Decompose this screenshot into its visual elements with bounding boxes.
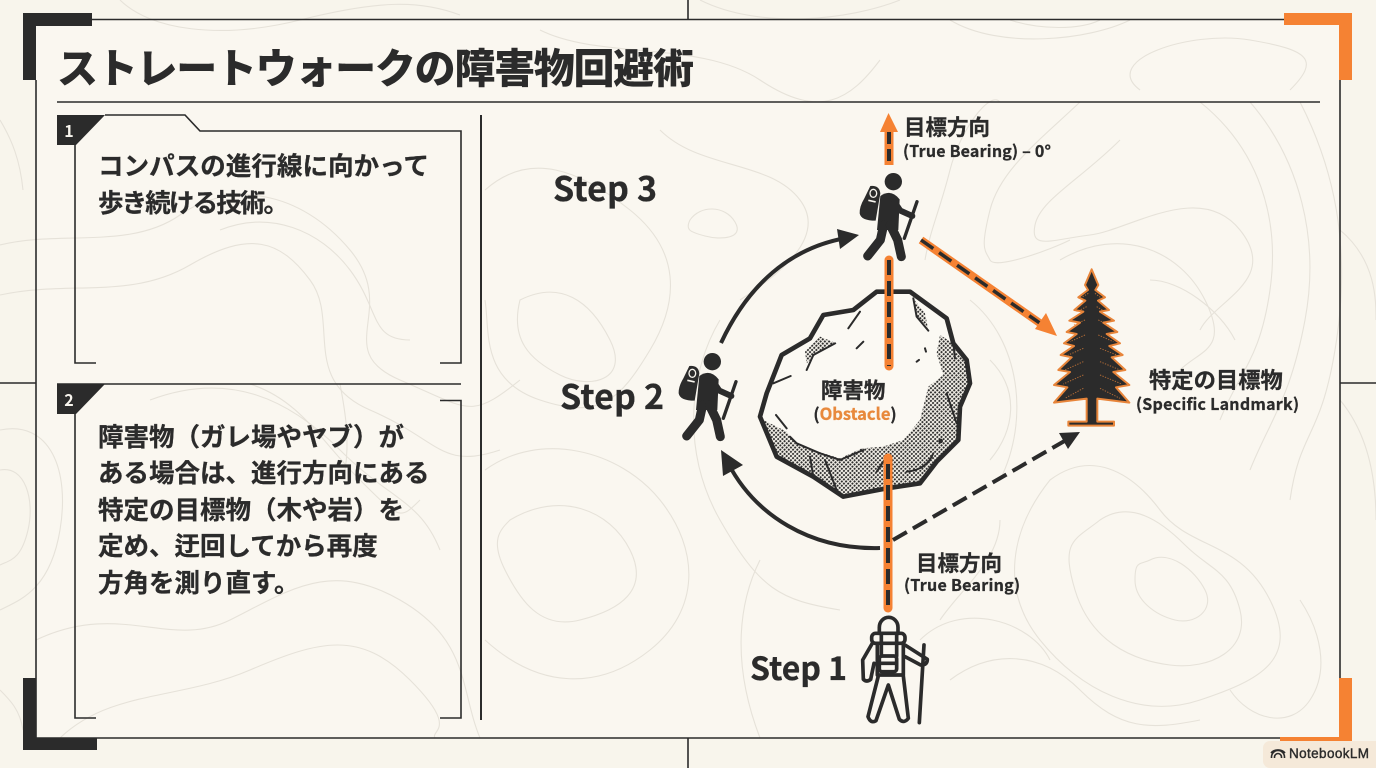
arrow: sight line to landmark (921, 240, 1057, 336)
label: specific landmark: 特定の目標物 (1149, 363, 1283, 395)
corner bracket: top right (1284, 13, 1352, 80)
panel 2 text: ある場合は、進行方向にある (98, 453, 430, 490)
corner bracket: top left (23, 13, 92, 80)
badge 2 (57, 384, 105, 414)
label: step 1: Step 1 (750, 644, 847, 690)
panel 1 (57, 115, 461, 363)
label: true bearing: 目標方向 (916, 547, 1002, 578)
arrow: detour to step 3 (721, 229, 859, 343)
label: true bearing 0 degrees: 目標方向 (904, 111, 990, 142)
corner bracket: bottom right (1280, 678, 1352, 749)
arrow: dashed line from start to landmark (893, 432, 1080, 540)
panel 2 (57, 384, 461, 718)
icon: hiker step 1 (863, 617, 927, 723)
bearing line: before obstacle (884, 458, 892, 608)
panel 2 text: 障害物（ガレ場やヤブ）が (98, 417, 404, 454)
panel 1 outline (75, 115, 461, 363)
label: obstacle: (Obstacle) (813, 401, 897, 425)
panel 1 text: 歩き続ける技術。 (98, 183, 289, 220)
arrow: detour to step 2 (721, 450, 880, 548)
corner bracket: bottom left (23, 678, 97, 750)
badge 1 (57, 115, 105, 145)
rock obstacle (760, 292, 970, 497)
notebooklm badge (1263, 741, 1376, 768)
bearing line: across obstacle (884, 260, 894, 366)
badge 1: 1 (64, 118, 74, 142)
icon: tree landmark (1054, 269, 1129, 426)
icon: hiker step 3 (860, 173, 917, 257)
icon: notebook (1271, 750, 1285, 758)
icon: hiker step 2 (679, 353, 736, 437)
title: ストレートウォークの障害物回避術 (57, 35, 694, 95)
panel 2 text: 方角を測り直す。 (98, 563, 299, 600)
badge 2: 2 (64, 387, 74, 411)
label: step 2: Step 2 (560, 370, 664, 419)
panel 2 text: 定め、迂回してから再度 (98, 526, 378, 563)
panel 1 text: コンパスの進行線に向かって (98, 146, 429, 183)
notebooklm badge: NotebookLM (1289, 746, 1369, 761)
label: specific landmark: (Specific Landmark) (1136, 391, 1299, 415)
arrow: true bearing 0 degrees (880, 113, 898, 165)
panel 2 text: 特定の目標物（木や岩）を (98, 490, 404, 527)
label: true bearing 0 degrees: (True Bearing) – 0° (903, 138, 1051, 162)
label: step 3: Step 3 (553, 162, 657, 211)
panel 2 outline (57, 384, 461, 718)
label: obstacle: 障害物 (821, 374, 885, 405)
label: true bearing: (True Bearing) (904, 572, 1020, 596)
